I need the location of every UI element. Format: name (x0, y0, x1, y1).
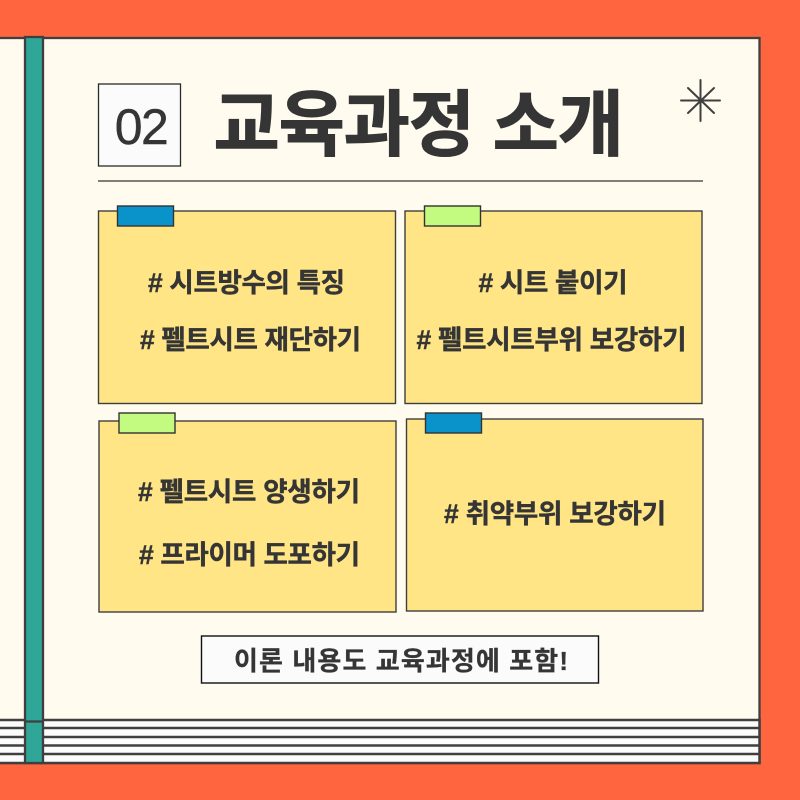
note text: # 펠트시트 재단하기 (140, 325, 361, 355)
number badge (98, 84, 180, 166)
note: top right (405, 206, 702, 404)
tape: blue (426, 413, 482, 433)
page edge stack (0, 720, 760, 763)
header divider (98, 180, 703, 182)
number badge: 02 (115, 99, 167, 155)
note text (138, 477, 360, 570)
book spine (25, 37, 43, 763)
icon: asterisk star (681, 80, 720, 121)
note text: # 취약부위 보강하기 (444, 499, 666, 529)
callout: 이론 내용도 교육과정에 포함! (234, 646, 568, 676)
note text: # 프라이머 도포하기 (139, 540, 360, 570)
tape: green (119, 413, 175, 433)
note: bottom right (406, 413, 703, 611)
note text: # 펠트시트 양생하기 (138, 477, 360, 507)
note text: # 시트 붙이기 (478, 268, 628, 298)
tape: blue (118, 206, 174, 226)
note text: # 시트방수의 특징 (148, 268, 345, 298)
tape: green (424, 206, 480, 226)
note: top left (98, 206, 396, 404)
note text (416, 268, 686, 355)
note: bottom left (99, 413, 396, 612)
callout (202, 636, 598, 683)
title: 교육과정 소개 (214, 86, 624, 166)
note text: # 펠트시트부위 보강하기 (416, 325, 686, 355)
note text (140, 268, 361, 355)
